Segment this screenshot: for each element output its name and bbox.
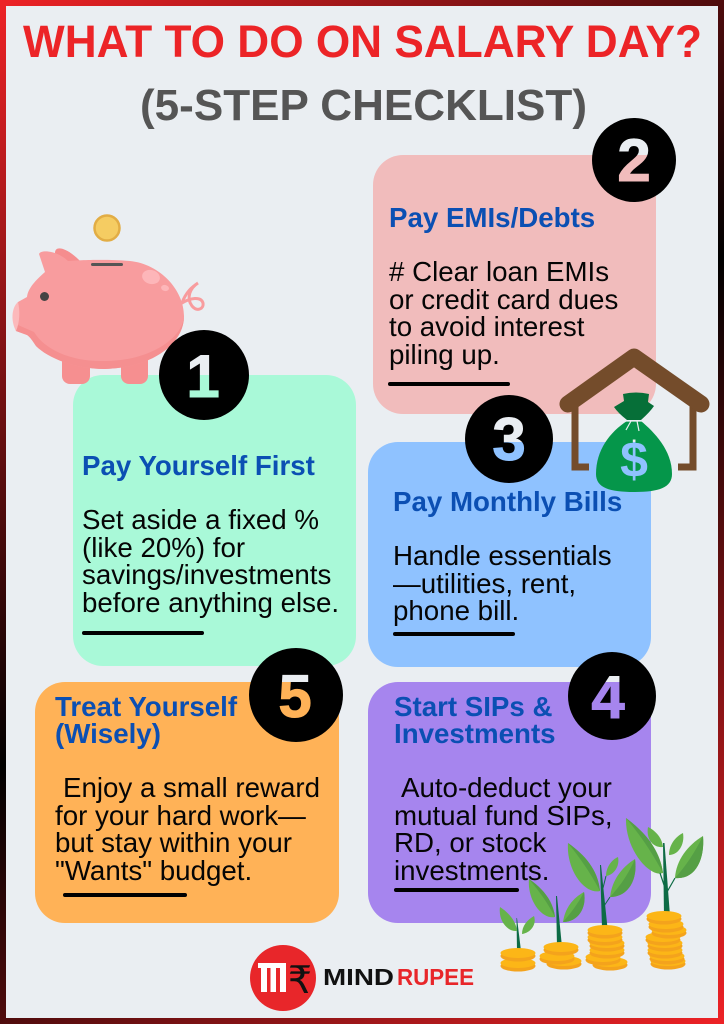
step 1 body text: Set aside a fixed % xyxy=(82,504,319,535)
panel: step 2 pay EMIs/debts xyxy=(373,155,656,414)
logo: Mindrupee xyxy=(250,945,474,1011)
logo wordmark: RUPEE xyxy=(397,964,474,990)
step 5 body text: Enjoy a small reward xyxy=(63,772,320,803)
plant 1 xyxy=(500,907,536,972)
step 4 body text: RD, or stock xyxy=(394,827,546,858)
badge: number 5: 5 xyxy=(278,663,312,730)
badge: number 2: 2 xyxy=(617,127,651,194)
badge: number 4: 4 xyxy=(591,664,625,731)
step 2 body text: piling up. xyxy=(389,339,500,370)
step 4 underline xyxy=(394,888,519,892)
step 1 body text xyxy=(82,504,339,618)
step 4 body text: Auto-deduct your xyxy=(401,772,612,803)
step 5 heading: Treat Yourself xyxy=(55,691,238,722)
logo wordmark xyxy=(323,964,474,990)
logo mark: ₹ xyxy=(288,960,312,1002)
step 4 heading xyxy=(394,691,556,749)
step 1 body text: savings/investments xyxy=(82,559,331,590)
logo mark xyxy=(250,945,316,1011)
subtitle: (5-STEP CHECKLIST) xyxy=(140,81,587,130)
panel: step 1 pay yourself first xyxy=(73,375,356,666)
step 4 heading: Start SIPs & xyxy=(394,691,552,722)
badge: number 1 xyxy=(159,330,249,420)
step 3 body text: phone bill. xyxy=(393,595,519,626)
step 4 heading: Investments xyxy=(394,718,556,749)
icon: house with money bag: $ xyxy=(620,432,648,488)
badge: number 5 xyxy=(249,648,343,742)
badge: number 2 xyxy=(592,118,676,202)
panel: step 4 start SIPs and investments xyxy=(368,682,651,923)
step 1 body text: before anything else. xyxy=(82,587,339,618)
step 2 body text: to avoid interest xyxy=(389,311,585,342)
step 5 body text: but stay within your xyxy=(55,827,292,858)
step 4 body text: mutual fund SIPs, xyxy=(394,800,613,831)
panel: step 5 treat yourself xyxy=(35,682,339,923)
step 3 underline xyxy=(393,632,515,636)
step 2 body text xyxy=(389,256,618,370)
badge: number 1: 1 xyxy=(186,343,220,410)
step 5 heading: (Wisely) xyxy=(55,718,161,749)
step 2 body text: or credit card dues xyxy=(389,284,618,315)
step 2 body text: # Clear loan EMIs xyxy=(389,256,609,287)
badge: number 3 xyxy=(465,395,553,483)
plant 4 xyxy=(626,818,703,970)
step 4 body text: investments. xyxy=(394,855,549,886)
logo wordmark: MIND xyxy=(323,964,394,990)
step 5 underline xyxy=(63,893,187,897)
step 5 body text xyxy=(55,772,320,886)
icon: piggy bank with coin xyxy=(12,216,203,384)
step 5 heading xyxy=(55,691,238,749)
step 4 body text xyxy=(394,772,613,886)
step 2 underline xyxy=(388,382,510,386)
step 5 body text: "Wants" budget. xyxy=(55,855,252,886)
icon: growing coin stacks with plants xyxy=(500,818,703,972)
step 3 body text: —utilities, rent, xyxy=(393,568,576,599)
step 2 heading: Pay EMIs/Debts xyxy=(389,202,595,233)
badge: number 3: 3 xyxy=(492,406,526,473)
plant 2 xyxy=(529,879,585,970)
step 5 body text: for your hard work— xyxy=(55,800,306,831)
title: WHAT TO DO ON SALARY DAY? xyxy=(23,16,702,67)
icon: house with money bag xyxy=(568,357,701,492)
step 3 heading: Pay Monthly Bills xyxy=(393,486,622,517)
badge: number 4 xyxy=(568,652,656,740)
panel: step 3 pay monthly bills xyxy=(368,442,651,667)
plant 3 xyxy=(568,843,636,970)
step 1 heading: Pay Yourself First xyxy=(82,450,315,481)
step 3 body text xyxy=(393,540,612,626)
step 1 underline xyxy=(82,631,204,635)
step 1 body text: (like 20%) for xyxy=(82,532,245,563)
step 3 body text: Handle essentials xyxy=(393,540,612,571)
